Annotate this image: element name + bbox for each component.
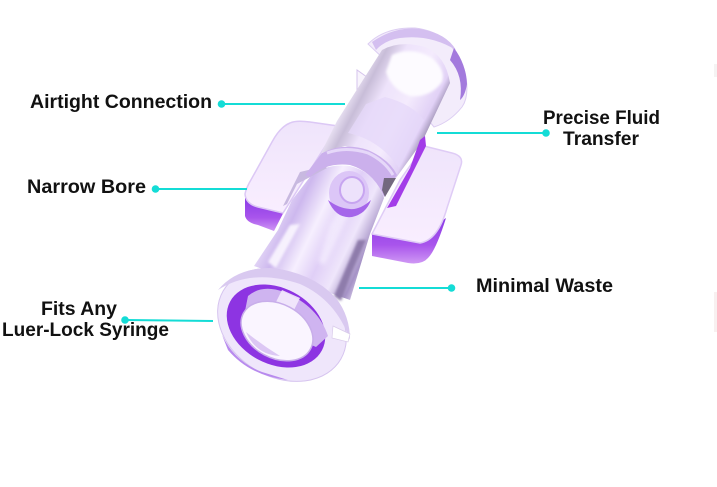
callout: Fits Any Luer-Lock Syringe: [2, 299, 213, 341]
callout: Airtight Connection: [30, 92, 345, 113]
callout: Airtight Connection: Airtight Connection: [30, 92, 212, 113]
callout: Minimal Waste: [359, 276, 613, 297]
bottom opening: [212, 268, 340, 384]
callout: Fits Any Luer-Lock Syringe: Luer-Lock Syringe: [2, 320, 169, 341]
callout: Minimal Waste: Minimal Waste: [476, 276, 613, 297]
bottom flange: [197, 246, 367, 404]
lower tube: [254, 165, 384, 301]
top flange: [357, 28, 467, 127]
upper tube: [321, 44, 450, 208]
callout: Narrow Bore: [27, 177, 247, 198]
right wing: [372, 146, 462, 263]
callout: Precise Fluid Transfer: [437, 108, 660, 150]
left wing: [245, 121, 338, 231]
icon: purple luer connector: [197, 28, 467, 404]
callout: Precise Fluid Transfer: Precise Fluid: [543, 108, 660, 129]
callout: Narrow Bore: Narrow Bore: [27, 177, 146, 198]
callout: Fits Any Luer-Lock Syringe: Fits Any: [41, 299, 117, 320]
collar ring: [305, 147, 397, 197]
bore ring: [328, 171, 371, 217]
callout: Precise Fluid Transfer: Transfer: [563, 129, 640, 150]
